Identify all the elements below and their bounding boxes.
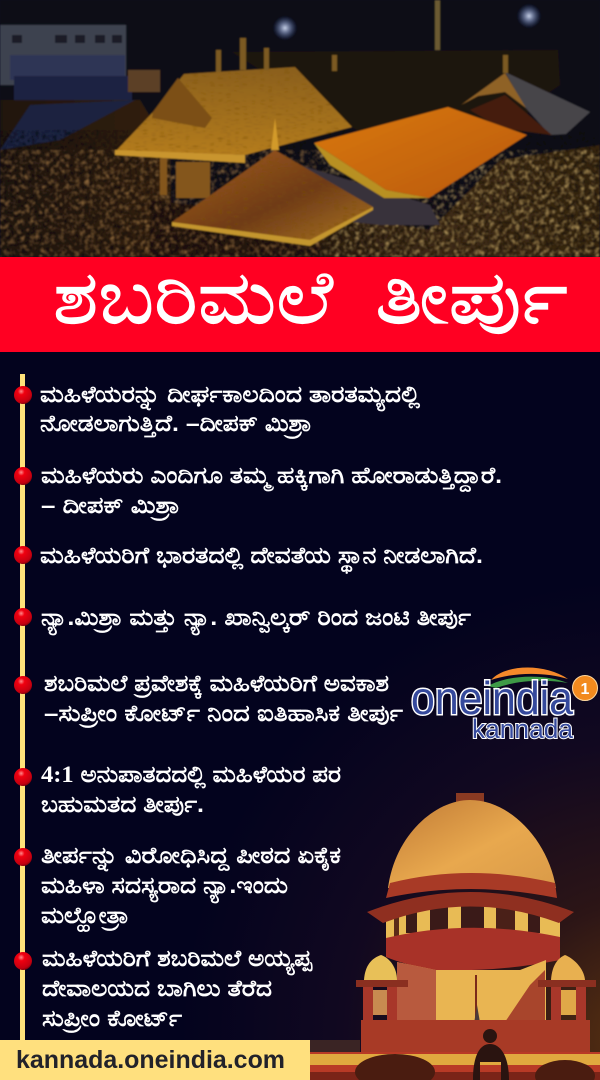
badge: 1: [581, 681, 590, 698]
point 3: ಮಹಿಳೆಯರಿಗೆ ಭಾರತದಲ್ಲಿ ದೇವತೆಯ ಸ್ಥಾನ ನೀಡಲಾಗಿದೆ.: [40, 542, 483, 575]
finials: [216, 38, 508, 73]
logo: oneindia kannada: [411, 667, 598, 744]
point 1: ನೋಡಲಾಗುತ್ತಿದೆ. –ದೀಪಕ್ ಮಿಶ್ರಾ: [40, 410, 312, 440]
crowd: [0, 100, 600, 257]
point 7: [41, 842, 341, 933]
marker 7: [14, 848, 32, 866]
point 8: ದೇವಾಲಯದ ಬಾಗಿಲು ತೆರೆದ: [42, 975, 272, 1001]
point 6: [41, 761, 341, 817]
kannada wordmark: kannada: [472, 714, 574, 744]
marker 4: [14, 608, 32, 626]
title: [53, 256, 568, 339]
steps: [310, 1040, 600, 1080]
marker 6: [14, 768, 32, 786]
marker 1: [14, 386, 32, 404]
tricolour arc: [488, 667, 568, 688]
point 5: –ಸುಪ್ರೀಂ ಕೋರ್ಟ್ ನಿಂದ ಐತಿಹಾಸಿಕ ತೀರ್ಪು: [44, 700, 403, 729]
eave: [367, 892, 574, 923]
lower wall: [397, 960, 546, 1024]
oneindia wordmark: oneindia: [411, 672, 573, 724]
base wall: [361, 1020, 590, 1052]
point 2: ಮಹಿಳೆಯರು ಎಂದಿಗೂ ತಮ್ಮ ಹಕ್ಕಿಗಾಗಿ ಹೋರಾಡುತ್ತಿದ್ದಾರೆ.: [41, 462, 502, 493]
right pavilion: [538, 955, 596, 1022]
point 6: ಬಹುಮತದ ತೀರ್ಪು.: [41, 791, 204, 817]
statue: [473, 1029, 509, 1080]
timeline: [14, 374, 32, 1040]
point 2: [41, 462, 502, 522]
point 7: ಮಲ್ಹೋತ್ರಾ: [41, 902, 129, 933]
background panel: [0, 352, 600, 1080]
right gable and grey roof: [461, 72, 590, 135]
point 6: 4:1 ಅನುಪಾತದದಲ್ಲಿ ಮಹಿಳೆಯರ ಪರ: [41, 761, 341, 789]
photo: Sabarimala temple: [0, 0, 600, 257]
point 8: ಮಹಿಳೆಯರಿಗೆ ಶಬರಿಮಲೆ ಅಯ್ಯಪ್ಪ: [42, 945, 313, 976]
point 2: – ದೀಪಕ್ ಮಿಶ್ರಾ: [41, 492, 180, 522]
back roof: [232, 50, 560, 140]
main golden roof: [115, 67, 352, 198]
title banner: [0, 256, 600, 352]
left pavilion: [356, 955, 408, 1022]
Supreme Court building: [310, 793, 600, 1080]
colonnade: [386, 902, 560, 945]
point 7: ಮಹಿಳಾ ಸದಸ್ಯರಾದ ನ್ಯಾ.ಇಂದು: [41, 872, 288, 904]
footer url bar: [0, 1040, 310, 1080]
point 4: ನ್ಯಾ.ಮಿಶ್ರಾ ಮತ್ತು ನ್ಯಾ. ಖಾನ್ವಿಲ್ಕರ್ ರಿಂದ ಜಂಟಿ ತೀರ್ಪು: [41, 604, 471, 636]
point 5: ಶಬರಿಮಲೆ ಪ್ರವೇಶಕ್ಕೆ ಮಹಿಳೆಯರಿಗೆ ಅವಕಾಶ: [44, 670, 389, 699]
marker 8: [14, 952, 32, 970]
dome band: [386, 873, 557, 898]
street lights: [273, 0, 541, 50]
url: kannada.oneindia.com: [16, 1046, 285, 1074]
lit area under orange roof: [290, 165, 440, 225]
badge: [572, 676, 598, 700]
point 7: ತೀರ್ಪನ್ನು ವಿರೋಧಿಸಿದ್ದ ಪೀಠದ ಏಕೈಕ: [41, 842, 341, 872]
point 1: [40, 381, 421, 440]
orange roof: [314, 107, 527, 198]
front pyramid roof: [172, 118, 373, 246]
marker 3: [14, 546, 32, 564]
bushes: [355, 1054, 595, 1080]
background building: [0, 25, 160, 102]
title: ತೀರ್ಪು: [375, 256, 568, 339]
point 8: ಸುಪ್ರೀಂ ಕೋರ್ಟ್: [42, 1005, 182, 1034]
point 5: [44, 670, 403, 729]
flag: [473, 975, 483, 1040]
point 1: ಮಹಿಳೆಯರನ್ನು ದೀರ್ಘಕಾಲದಿಂದ ತಾರತಮ್ಯದಲ್ಲಿ: [40, 381, 421, 412]
point 8: [42, 945, 313, 1034]
title: ಶಬರಿಮಲೆ: [53, 256, 333, 339]
marker 5: [14, 676, 32, 694]
drum: [386, 928, 560, 970]
main dome: [388, 793, 556, 888]
marker 2: [14, 467, 32, 485]
